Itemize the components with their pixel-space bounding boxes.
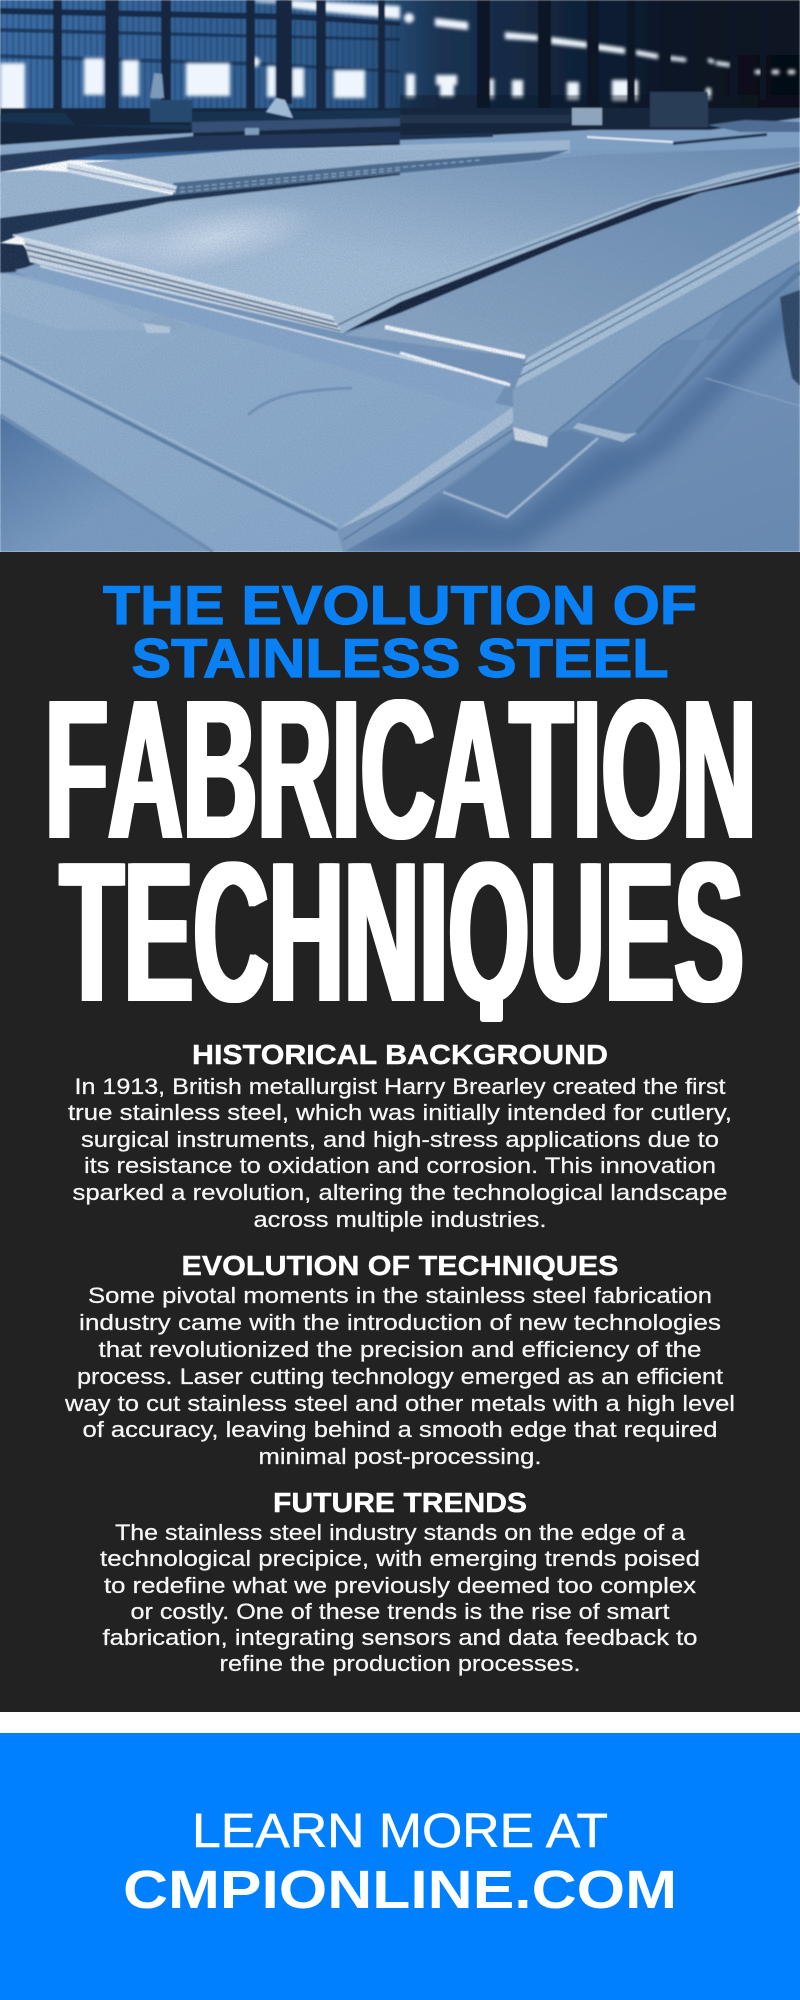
- wooden block: [143, 313, 187, 333]
- text block: historical background: In 1913, British metallurgist Harry Brearley created the first: [74, 1074, 726, 1099]
- texture grain: [0, 150, 800, 552]
- lower centre plate: [443, 430, 598, 517]
- left floor: [0, 415, 213, 552]
- text block: future trends: The stainless steel industry stands on the edge of a: [115, 1520, 686, 1545]
- text block: future trends: refine the production processes.: [220, 1651, 580, 1676]
- subtitle: the evolution of stainless steel: STAINLESS STEEL: [132, 627, 668, 689]
- text block: future trends: to redefine what we previously deemed too complex: [104, 1573, 696, 1598]
- floor: [0, 260, 800, 552]
- far plates, right side: [400, 118, 800, 175]
- text block: future trends: fabrication, integrating sensors and data feedback to: [102, 1625, 698, 1650]
- window panes and skylights: [0, 0, 795, 113]
- wall beams: [0, 8, 400, 73]
- title: fabrication: FABRICATION: [45, 659, 756, 881]
- text block: evolution of techniques: Some pivotal moments in the stainless steel fabrication: [88, 1283, 712, 1308]
- text block: historical background: surgical instruments, and high-stress applications due to: [81, 1127, 719, 1152]
- text block: historical background: true stainless steel, which was initially intended for cutlery,: [68, 1100, 732, 1125]
- panel: call to action: [0, 1733, 800, 2000]
- long layer under the top stack: [15, 265, 507, 412]
- foreground plates: [0, 273, 513, 552]
- top plate surface: [13, 147, 800, 317]
- floor level machinery: [0, 73, 800, 148]
- text block: evolution of techniques: minimal post-processing.: [258, 1444, 542, 1469]
- text: learn more at: LEARN MORE AT: [192, 1805, 608, 1858]
- text block: evolution of techniques: [64, 1283, 735, 1469]
- left far plate with dark plate below: [0, 133, 193, 155]
- heading: historical background: HISTORICAL BACKGROUND: [192, 1039, 608, 1070]
- seam: [0, 173, 400, 243]
- text block: historical background: its resistance to oxidation and corrosion. This innovation: [84, 1153, 716, 1178]
- heading: evolution of techniques: EVOLUTION OF TECHNIQUES: [182, 1250, 618, 1281]
- second plate surface: [345, 173, 800, 358]
- columns: [53, 0, 385, 125]
- section: historical background: [68, 1039, 732, 1232]
- text: website address: CMPIONLINE.COM: [123, 1860, 677, 1920]
- text block: evolution of techniques: industry came with the introduction of new technologies: [79, 1310, 721, 1335]
- mask trimming the Q tail: [440, 1008, 540, 1042]
- section: future trends: [100, 1487, 700, 1676]
- text block: future trends: or costly. One of these trends is the rise of smart: [130, 1599, 670, 1624]
- top plate edge stack: [23, 238, 343, 333]
- text block: future trends: technological precipice, with emerging trends poised: [100, 1546, 700, 1571]
- subtitle: the evolution of stainless steel: [103, 574, 697, 689]
- bar with light end face: [513, 230, 800, 437]
- text block: historical background: across multiple industries.: [254, 1207, 546, 1232]
- second plate, right: [573, 248, 800, 442]
- panel: dark title and text panel: [0, 552, 800, 1712]
- text block: evolution of techniques: of accuracy, leaving behind a smooth edge that required: [82, 1417, 718, 1442]
- text block: historical background: [68, 1074, 732, 1232]
- layered edge of middle plate: [515, 210, 800, 388]
- dark gap below top plate: [343, 165, 800, 333]
- small stack front edge: [67, 163, 177, 193]
- text block: evolution of techniques: way to cut stainless steel and other metals with a high level: [64, 1391, 735, 1416]
- photo: stacked stainless steel plates in a factory hall: [0, 0, 800, 552]
- serrated stack side: [173, 150, 570, 195]
- text block: historical background: sparked a revolution, altering the technological landscape: [72, 1180, 728, 1205]
- text block: evolution of techniques: that revolutionized the precision and efficiency of the: [98, 1337, 702, 1362]
- heading: future trends: FUTURE TRENDS: [273, 1487, 527, 1518]
- left surface: [0, 170, 173, 218]
- text block: future trends: [100, 1520, 700, 1676]
- subtitle: the evolution of stainless steel: THE EVOLUTION OF: [103, 574, 697, 636]
- section: evolution of techniques: [64, 1250, 735, 1469]
- far surface: [83, 140, 570, 185]
- floor shadow near plates: [330, 285, 800, 552]
- title: techniques: TECHNIQUES: [60, 821, 743, 1044]
- Q tail: [480, 998, 503, 1022]
- text block: evolution of techniques: process. Laser cutting technology emerged as an efficient: [77, 1364, 723, 1389]
